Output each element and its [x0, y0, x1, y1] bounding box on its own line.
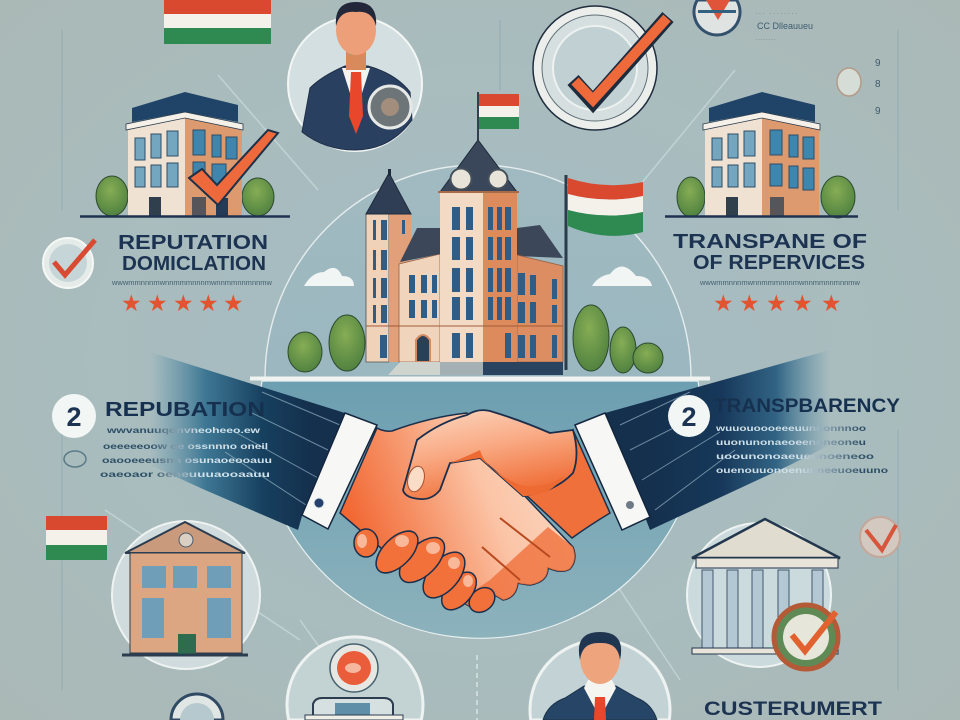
body text: transparency: uoounonoaeueonoeneoo — [716, 452, 874, 461]
left sleeve — [150, 352, 345, 530]
curled fingers — [354, 524, 500, 617]
star rating left: ★ — [121, 290, 142, 316]
number badge: 2 left — [52, 394, 96, 438]
body text: transparency — [715, 424, 888, 475]
number badge: 2 left: 2 — [66, 402, 82, 432]
faint caption top right: ··· ········ — [755, 9, 799, 18]
heading: reputation domiclation — [118, 232, 268, 275]
faint caption top right — [755, 9, 813, 44]
heading: transparency: TRANSPBARENCY — [714, 396, 900, 417]
lower blue disc — [259, 381, 701, 638]
left cuff — [302, 413, 377, 529]
number badge: 2 right: 2 — [681, 402, 697, 432]
faint caption top right: CC Dlleauueu — [757, 21, 813, 31]
star rating right: ★ — [713, 290, 734, 316]
small body text right: wwwmmnnnmwnnmmmnnnmwnnmmnnmnnmw — [699, 280, 861, 287]
heading: transpane of services: TRANSPANE OF — [673, 231, 867, 253]
star rating left: ★ — [198, 290, 219, 316]
faint caption top right: ········ — [755, 35, 776, 44]
small check badge left — [43, 238, 95, 288]
horizon line — [250, 376, 710, 380]
star rating right — [713, 290, 842, 316]
body text: transparency: wuuouoooeeeuunnonnnoo — [715, 424, 866, 433]
heading: reputation domiclation: DOMICLATION — [122, 253, 266, 275]
small seal right — [860, 517, 900, 557]
building: top left — [80, 92, 290, 216]
building: top right — [665, 92, 858, 218]
body text: reputation: oaooeeeusnn osunaoeooauu — [102, 456, 272, 465]
badge: check seal top — [533, 6, 668, 130]
right hand, back portion — [510, 430, 610, 538]
small body text left: wwwmmnnnmwnnmmmnnnmwnnmmnnmnnmw — [111, 280, 273, 287]
body text: transparency: ouenouuonoenuuneeuoeuuno — [716, 466, 888, 475]
star rating left: ★ — [173, 290, 194, 316]
portrait: businessman top — [288, 2, 422, 151]
fingertips shading — [460, 527, 575, 610]
body text: transparency: uuonunonaeoeenoneoneu — [716, 438, 866, 447]
thumbnail — [405, 464, 427, 494]
star rating left: ★ — [223, 290, 244, 316]
star rating left: ★ — [147, 290, 168, 316]
temple building lower right — [687, 519, 840, 669]
star rating right: ★ — [792, 290, 813, 316]
small emblem top right — [694, 0, 740, 35]
ring icon left — [64, 451, 86, 467]
flag: top left — [164, 0, 271, 44]
heading: transpane of services: OF REPERVICES — [693, 252, 865, 274]
heading: reputation domiclation: REPUTATION — [118, 232, 268, 254]
portrait: businessman bottom — [530, 632, 670, 720]
clouds — [304, 266, 652, 286]
star rating right: ★ — [739, 290, 760, 316]
small side icon top right: 8 — [875, 79, 881, 90]
finger separations — [482, 518, 550, 580]
flag: lower left — [46, 516, 107, 560]
heading: custerument: CUSTERUMERT — [704, 699, 882, 720]
small side icon top right: 9 — [875, 106, 881, 117]
number badge: 2 right — [668, 395, 710, 437]
body text: reputation: oaeoaor oeneuuuaooaauu — [100, 470, 270, 479]
car badge bottom — [287, 637, 423, 720]
bank building lower left — [112, 521, 260, 669]
heading: 2 reputation: REPUBATION — [105, 399, 265, 421]
handshake — [302, 410, 650, 617]
body text: reputation — [100, 426, 272, 479]
body text: reputation: oeeeeeoow oe ossnnno oneil — [103, 442, 268, 451]
central dome arc — [265, 165, 691, 378]
heading: transpane of services — [673, 231, 867, 274]
star rating right: ★ — [821, 290, 842, 316]
flag: right of building — [566, 175, 643, 370]
right hand with thumb — [403, 410, 576, 499]
small emblem bottom left — [171, 694, 223, 720]
star rating right: ★ — [766, 290, 787, 316]
star rating left — [121, 290, 244, 316]
central university building — [288, 140, 663, 375]
right sleeve — [605, 350, 830, 530]
flag: on central tower — [478, 92, 519, 140]
left hand palm and fingers — [340, 413, 575, 610]
right cuff — [575, 413, 650, 530]
body text: reputation: wwvanuuqonvneoheeo.ew — [105, 426, 261, 435]
small side icon top right — [837, 58, 881, 117]
small side icon top right: 9 — [875, 58, 881, 69]
